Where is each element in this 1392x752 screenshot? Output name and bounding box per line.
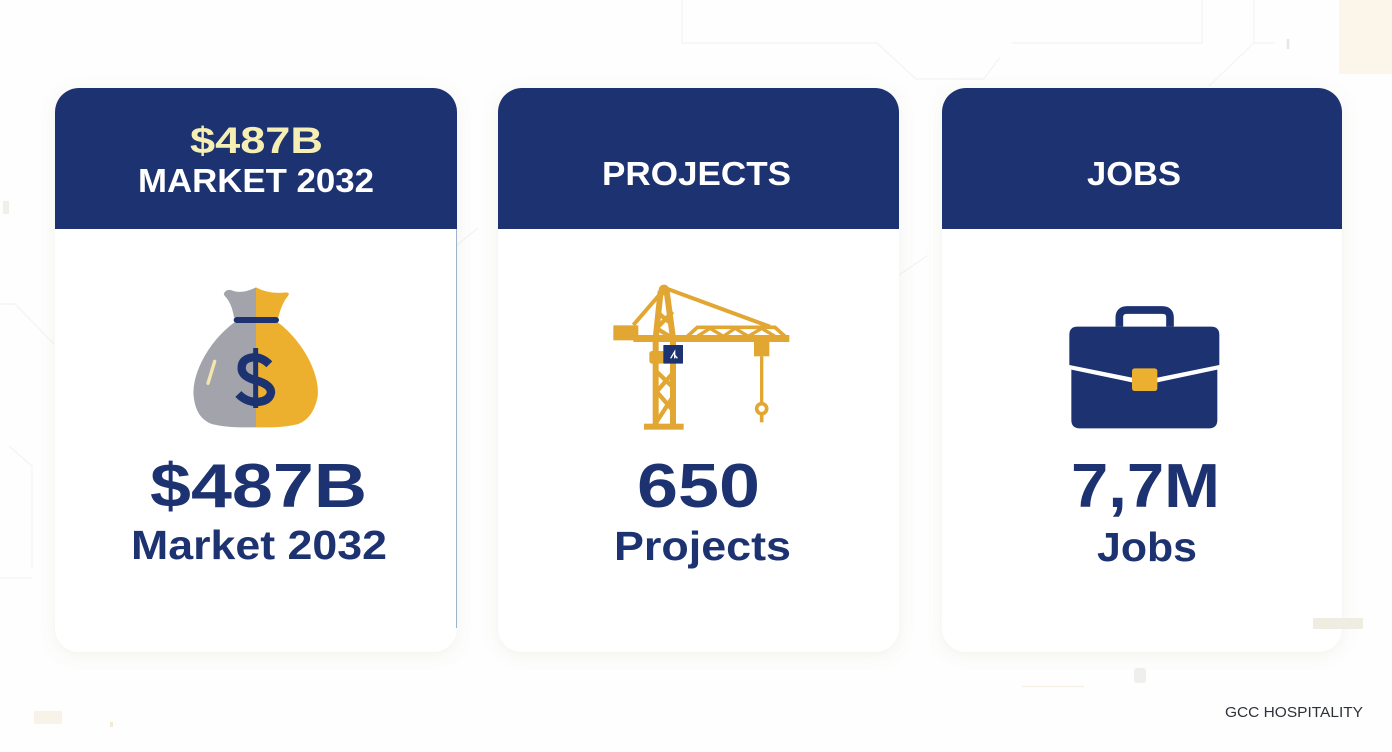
panel header: market	[55, 88, 457, 229]
value: 7,7M: 7,7M	[1071, 452, 1220, 521]
header value: $487B: $487B	[190, 120, 323, 161]
header label: market 2032: MARKET 2032	[138, 162, 374, 199]
header label: jobs: JOBS	[1087, 155, 1181, 192]
icon: briefcase	[1069, 310, 1219, 428]
brand footer: GCC HOSPITALITY	[1225, 705, 1363, 721]
panel header: projects	[498, 88, 899, 229]
value: $487B: $487B	[150, 452, 367, 521]
icon: crane	[613, 285, 789, 430]
label: Projects: Projects	[614, 523, 791, 569]
icon: money bag	[193, 287, 318, 427]
panel header: jobs	[942, 88, 1342, 229]
label: Jobs: Jobs	[1097, 524, 1197, 570]
panel: projects	[498, 88, 899, 652]
value: 650: 650	[637, 452, 760, 521]
panel: jobs	[942, 88, 1342, 652]
right edge line	[456, 229, 458, 628]
decorative tab	[1313, 618, 1363, 629]
label: Market 2032: Market 2032	[131, 522, 387, 568]
panel: market	[55, 88, 457, 652]
header label: projects: PROJECTS	[602, 155, 791, 192]
